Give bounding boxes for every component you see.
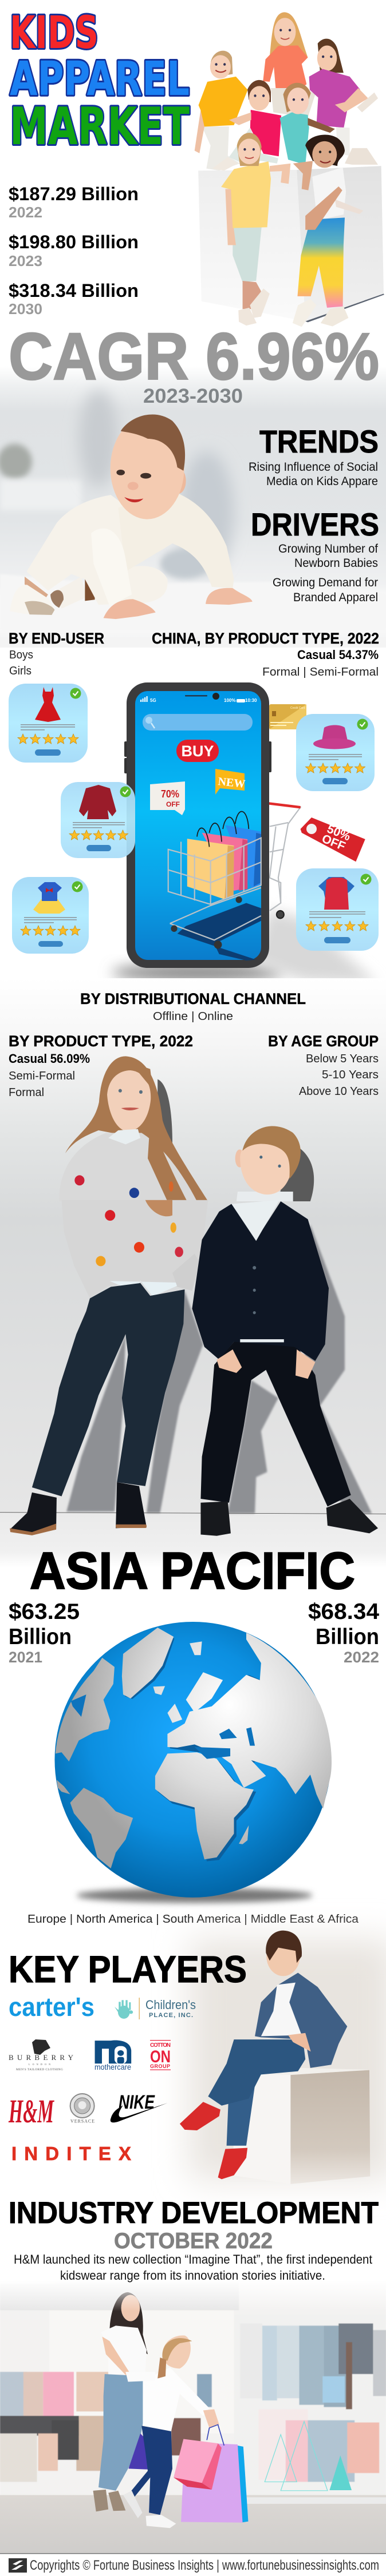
panel: by distributional channel: BY DISTRIBUTIONAL CHANNEL	[80, 990, 306, 1007]
logo: inditex: INDITEX	[11, 2143, 131, 2164]
panel: by distributional channel: Offline | Online	[153, 1010, 233, 1023]
50 percent off tag	[301, 817, 365, 862]
logo: cotton on group: COTTON	[150, 2042, 171, 2049]
heading: asia pacific: ASIA PACIFIC	[30, 1542, 355, 1600]
panel: hero	[9, 7, 384, 327]
value 2022: $68.34	[308, 1599, 379, 1624]
50 percent off tag: 50%	[325, 822, 353, 844]
panel: e-commerce phone illustration	[9, 682, 379, 984]
shopping bags	[174, 2424, 248, 2523]
illustration: boy on cube	[180, 1931, 370, 2184]
value 2022: Billion	[316, 1625, 379, 1649]
panel: trends and drivers with baby	[0, 366, 386, 648]
illustration: crawling baby	[0, 390, 386, 636]
illustration: globe	[54, 1622, 332, 1903]
market value 2022: $187.29 Billion	[9, 184, 139, 204]
logo: cotton on group: GROUP	[150, 2063, 170, 2069]
date: OCTOBER 2022	[114, 2229, 273, 2253]
new badge: NEW	[217, 775, 246, 791]
upper bodies	[59, 1056, 314, 1201]
panel: by product type: Semi-Formal	[9, 1070, 75, 1082]
70% off bubble: OFF	[166, 800, 180, 808]
panel: by age group: Below 5 Years	[306, 1053, 379, 1065]
panel: by age group: BY AGE GROUP	[268, 1033, 379, 1050]
product card: jacket	[61, 782, 135, 858]
logo: childrens place	[115, 1998, 196, 2019]
market value 2030	[9, 280, 139, 317]
cart with bags on screen	[168, 812, 261, 960]
kid in turquoise shirt	[279, 83, 335, 165]
panel: china by product type: Casual 54.37%	[297, 648, 379, 662]
panel: key players	[8, 1931, 386, 2184]
panel: by age group	[268, 1033, 379, 1098]
floor	[0, 2495, 386, 2553]
panel: industry development	[0, 2196, 386, 2553]
70% off bubble	[150, 781, 185, 815]
shoes on box	[212, 148, 378, 170]
shopping cart behind phone	[269, 803, 301, 918]
market value 2022: 2022	[9, 204, 42, 221]
logo: burberry: MEN'S TAILORED CLOTHING	[16, 2068, 63, 2071]
lower bodies	[0, 1200, 386, 1536]
product card: blue and yellow dress	[12, 877, 89, 954]
title: KIDS	[10, 7, 99, 59]
title: MARKET	[10, 97, 190, 157]
panel: by age group: 5-10 Years	[322, 1069, 379, 1081]
logo: burberry: LONDON	[29, 2063, 50, 2066]
illustration: children on white cube	[195, 12, 384, 327]
logo: fortune business insights	[9, 2558, 27, 2573]
logo: burberry	[9, 2039, 74, 2071]
market value 2023: $198.80 Billion	[9, 232, 139, 252]
decorative triangles	[265, 2422, 352, 2491]
kid in pink shirt	[229, 80, 281, 164]
illustration: shopping mother and daughter	[0, 2281, 386, 2553]
panel: by product type	[9, 1033, 193, 1099]
value 2021: 2021	[9, 1649, 42, 1666]
panel: by end-user: BY END-USER	[9, 630, 104, 647]
kid in purple shirt	[309, 39, 378, 156]
background: kids section	[0, 978, 386, 1513]
logo: versace: VERSACE	[70, 2119, 94, 2123]
credit card: Credit Card	[290, 706, 305, 710]
market value 2023	[9, 232, 139, 269]
phone body	[124, 682, 271, 968]
logo: cotton on group: ON	[150, 2047, 171, 2066]
search bar	[143, 714, 253, 731]
panel: by product type: BY PRODUCT TYPE, 2022	[9, 1033, 193, 1050]
baby background	[0, 366, 386, 648]
title	[10, 7, 190, 157]
logo: versace	[70, 2094, 94, 2123]
regions list: Europe | North America | South America | Middle East & Africa	[27, 1913, 359, 1926]
kid in orange shirt	[195, 51, 248, 170]
trends text: Rising Influence of Social	[249, 461, 378, 474]
title: APPAREL	[10, 52, 190, 106]
panel: asia pacific	[9, 1542, 379, 1926]
logo: childrens place: PLACE, INC.	[149, 2012, 193, 2019]
market value 2030: 2030	[9, 300, 42, 317]
logo: nike: NIKE	[119, 2091, 155, 2113]
key players background	[189, 1939, 386, 2180]
new badge	[215, 769, 246, 795]
logo: mothercare	[94, 2040, 131, 2071]
logo: mothercare: mothercare	[94, 2063, 131, 2071]
status bar	[140, 696, 257, 703]
footer	[0, 2553, 386, 2576]
status bar: 10:30	[245, 698, 257, 703]
drivers text: Branded Apparel	[293, 591, 378, 604]
value 2021: $63.25	[9, 1599, 80, 1624]
shadow under phone	[112, 910, 378, 984]
product card: pink hat	[296, 714, 375, 791]
kid in yellow shirt	[221, 133, 290, 326]
logo: burberry: BURBERRY	[9, 2053, 74, 2062]
development text	[14, 2252, 372, 2283]
70% off bubble: 70%	[161, 788, 179, 800]
value 2022: 2022	[344, 1649, 379, 1666]
trends text: Media on Kids Appare	[266, 475, 378, 488]
panel: by end-user: Boys	[9, 649, 33, 661]
logo: cotton on group	[150, 2040, 171, 2070]
buy badge	[176, 740, 219, 762]
product card: red dress	[9, 684, 88, 763]
panel: by product type: Casual 56.09%	[9, 1051, 90, 1066]
fade over top of store photo	[0, 2280, 386, 2311]
status bar: 5G	[150, 698, 156, 703]
value 2021	[9, 1599, 80, 1666]
development text: kidswear range from its innovation stories initiative.	[60, 2268, 325, 2283]
market value 2030: $318.34 Billion	[9, 280, 139, 301]
status bar: 100%	[224, 698, 235, 703]
drivers text: Growing Demand for	[273, 576, 378, 589]
value 2021: Billion	[9, 1625, 72, 1649]
logo: nike	[111, 2091, 167, 2122]
panel: china by product type	[152, 630, 379, 678]
panel: by end-user	[9, 630, 104, 677]
logo: h&m: H&M	[8, 2093, 54, 2130]
panel: by end-user: Girls	[9, 665, 31, 677]
kid in rainbow trousers	[293, 134, 363, 327]
buy badge: BUY	[181, 743, 214, 760]
trends text	[249, 461, 378, 488]
market value 2022	[9, 184, 139, 221]
credit card	[269, 704, 306, 729]
panel: by product type: Formal	[9, 1086, 44, 1099]
kid in coral shirt	[263, 12, 315, 117]
store interior	[0, 2281, 386, 2502]
market value 2023: 2023	[9, 252, 42, 269]
heading: key players: KEY PLAYERS	[9, 1948, 247, 1990]
50 percent off tag: OFF	[320, 832, 347, 854]
floor	[0, 1513, 386, 1567]
logo: childrens place: Children's	[145, 1998, 196, 2012]
drivers text: Growing Number of	[278, 542, 378, 555]
product card: t-shirt	[296, 868, 379, 951]
drivers text	[273, 542, 378, 604]
logo: carters: carter's	[9, 1992, 94, 2022]
drivers text: Newborn Babies	[294, 557, 378, 570]
panel: china by product type: Formal | Semi-Formal	[262, 666, 379, 678]
panel: by distributional channel	[80, 990, 306, 1023]
illustration: girl and boy standing	[0, 1056, 386, 1567]
panel: by age group: Above 10 Years	[299, 1085, 379, 1098]
girl	[123, 2335, 219, 2528]
woman	[93, 2292, 157, 2511]
value 2022	[308, 1599, 379, 1666]
cagr figure: 2023-2030	[143, 385, 243, 407]
